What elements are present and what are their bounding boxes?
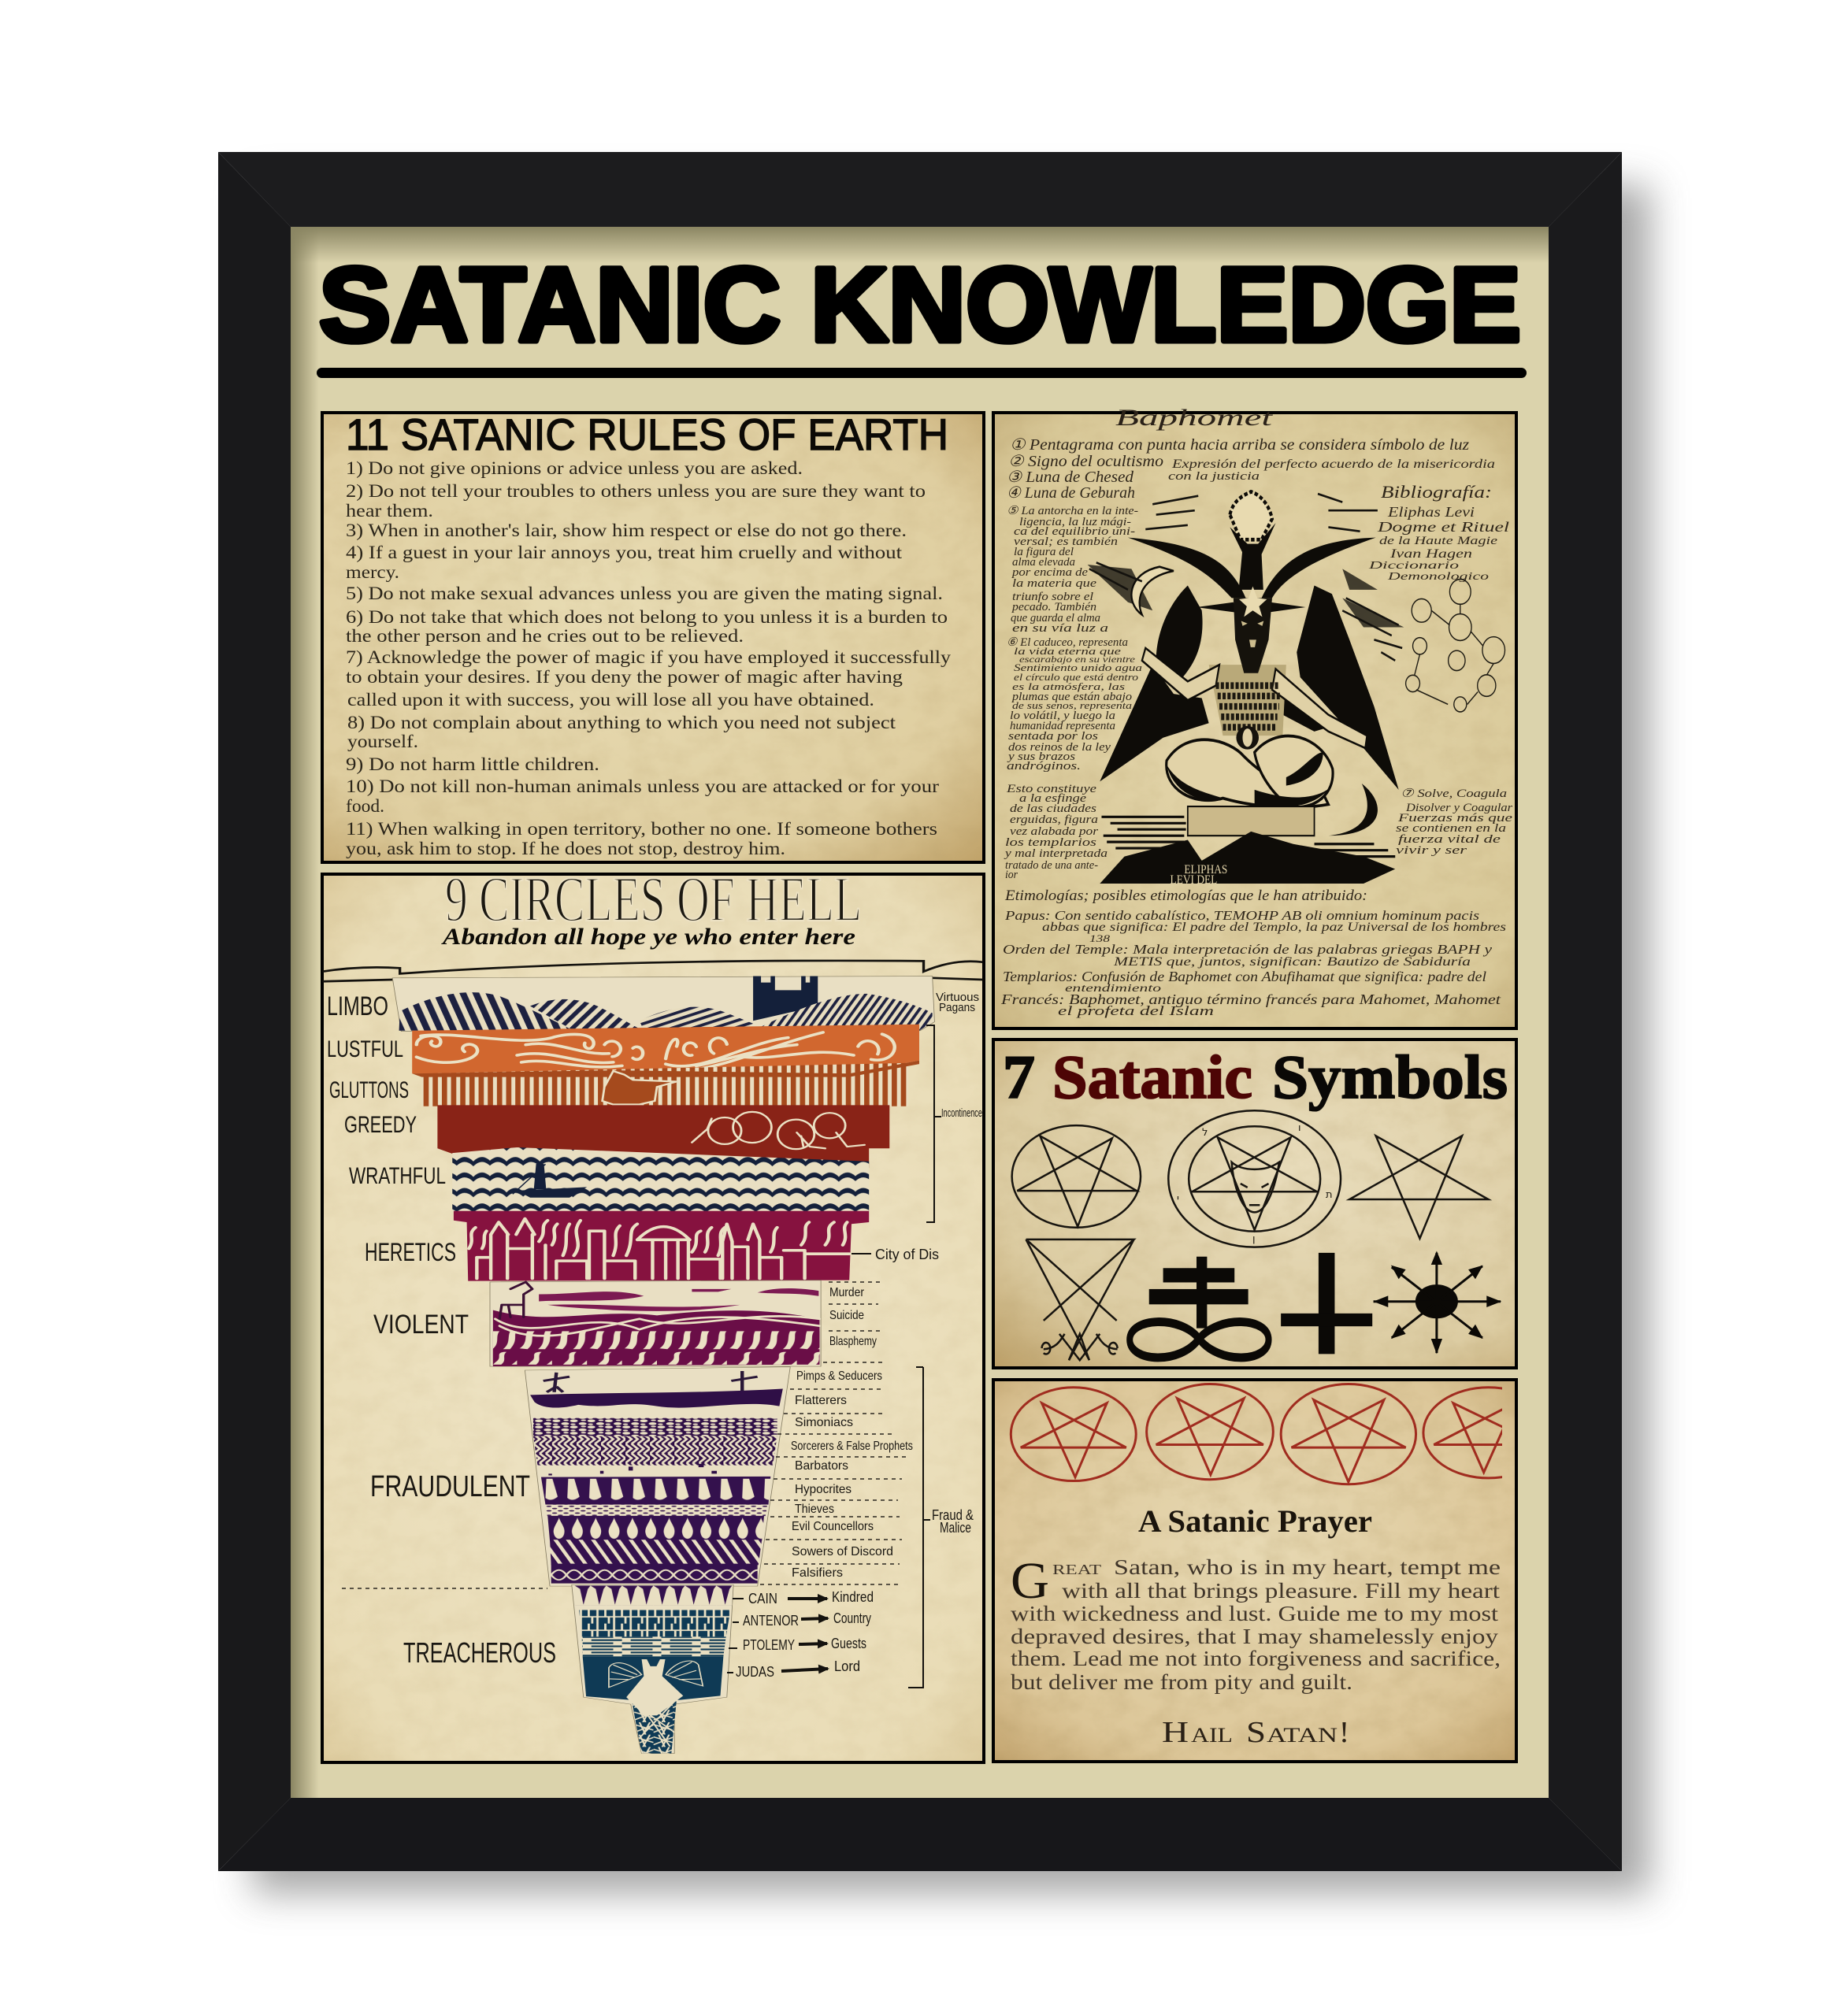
band: sorcerers [533,1436,777,1466]
text block: handwritten notes: dos reinos de la ley [1008,741,1111,754]
icon: castle [753,976,818,1021]
labels: circles of hell names: LIMBO [327,991,388,1021]
text block: rules list: 4) If a guest in your lair annoys you, treat him cruelly and without [346,543,903,562]
text block: handwritten notes: Orden del Temple: Mala interpretación de las palabras griegas BAPH y [1003,942,1493,957]
text block: handwritten notes: fuerza vital de [1398,833,1501,846]
panel: 7 satanic symbols [993,1040,1516,1368]
labels: sins and sub-circles: Fraud & [932,1507,974,1523]
text block: handwritten notes: humanidad representa [1010,720,1115,732]
labels: circles of hell names: TREACHEROUS [403,1636,556,1669]
text block: handwritten notes: es la atmósfera, las [1012,680,1125,692]
text block: handwritten notes: ② Signo del ocultismo [1008,453,1163,470]
text block: handwritten notes: ior [1005,869,1018,881]
text block: handwritten notes: alma elevada [1012,556,1075,569]
text block: handwritten notes: abbas que significa: El padre del Templo, la paz Universal de los hombres [1042,921,1506,934]
caduceus [1236,726,1259,750]
text block: handwritten notes: en su vía luz a [1012,622,1108,635]
text block: rules list: you, ask him to stop. If he does not stop, destroy him. [346,839,785,858]
text block: rules list [346,458,952,858]
text block: handwritten notes: escarabajo en su vientre [1019,654,1136,665]
labels: sins and sub-circles: Barbators [795,1459,848,1473]
text block: handwritten notes: triunfo sobre el [1012,591,1093,603]
text block: handwritten notes: METIS que, juntos, significan: Bautizo de Sabiduría [1113,955,1471,969]
labels: circles of hell names: HERETICS [365,1238,456,1266]
text block: handwritten notes: tratado de una ante- [1005,859,1098,872]
heading: symbols [1003,1043,1508,1111]
text block: handwritten notes: se contienen en la [1396,822,1506,835]
band: flatterers [530,1389,783,1408]
text block: handwritten notes: lo volátil, y luego la [1010,710,1115,722]
labels: circles of hell names: LUSTFUL [327,1036,403,1062]
text block: handwritten notes: sentada por los [1008,730,1098,743]
icon: hebrew letters on sigil: י [1177,1193,1179,1205]
panel: baphomet manuscript [993,405,1516,1028]
feather strokes [1089,494,1402,661]
text block: prayer: REAT [1052,1562,1101,1577]
text block: handwritten notes: ⑤ La antorcha en la inte- [1007,505,1138,517]
text block: handwritten notes: ④ Luna de Geburah [1007,484,1135,502]
boulders and figures [708,1117,741,1144]
text block: prayer: G [1011,1552,1049,1610]
text block: rules list: 9) Do not harm little children. [346,754,599,774]
labels: sins and sub-circles: JUDAS [736,1664,774,1680]
labels: circles of hell names: WRATHFUL [349,1163,446,1189]
icon: inverted cross [1281,1253,1372,1354]
diagram: small tree [1406,580,1505,712]
panel: 11 satanic rules of earth [322,410,984,862]
text block: handwritten notes: a la esfinge [1019,792,1086,805]
text block: handwritten notes: y mal interpretada [1004,847,1108,860]
text block: handwritten notes: el profeta del Islam [1058,1003,1214,1018]
icon: hebrew letters on sigil: ו [1298,1122,1301,1134]
text block: handwritten notes: de la Haute Magie [1379,535,1497,547]
text block: handwritten notes: Templarios: Confusión de Baphomet con Abufihamat que significa: padre del [1003,969,1486,984]
text block: handwritten notes: Etimologías; posibles etimologías que le han atribuido: [1004,888,1367,904]
text block: handwritten notes: Demonologico [1386,571,1489,583]
subheading: Abandon all hope ye who enter here [441,924,855,950]
illustration: baphomet figure: ELIPHAS [1184,863,1227,876]
chart: lower hell layers [525,1367,790,1754]
text block: prayer: with all that brings pleasure. Fill my heart [1062,1579,1501,1603]
wings [1088,565,1404,790]
band: falsifiers [551,1564,758,1584]
text block: handwritten notes: Eliphas Levi [1387,504,1475,520]
circle: lustful [412,1025,919,1073]
brackets and leader lines [342,1025,941,1688]
text block: handwritten notes: con la justicia [1168,470,1260,483]
title rule [317,368,1527,378]
demons [544,1371,758,1392]
labels: sins and sub-circles: Falsifiers [792,1566,843,1580]
text block: prayer: but deliver me from pity and guilt. [1011,1670,1352,1694]
text block: rules list: 10) Do not kill non-human animals unless you are attacked or for your [346,776,939,796]
heading: symbols: Satanic [1052,1043,1252,1111]
text block: prayer: with wickedness and lust. Guide me to my most [1011,1602,1499,1625]
text block: rules list: yourself. [347,732,418,751]
labels: sins and sub-circles: Incontinence [941,1106,982,1120]
text block: handwritten notes: Francés: Baphomet, antiguo término francés para Mahomet, Mahomet [1000,991,1501,1007]
labels: sins and sub-circles: Blasphemy [829,1335,877,1348]
circle: treacherous [572,1584,733,1754]
text block: handwritten notes: Esto constituye [1006,783,1096,795]
text block: rules list: to obtain your desires. If you deny the power of magic after having [346,667,903,687]
icon: boat and ferryman [517,1187,587,1198]
text block: handwritten notes: ⑥ El caduceo, representa [1007,636,1128,649]
labels: sins and sub-circles: Evil Councellors [792,1520,874,1533]
closing line [1162,1716,1349,1749]
band: judas [583,1656,723,1700]
band: barbators [548,1464,717,1476]
labels: circles of hell names [327,991,556,1669]
text block: prayer [1011,1552,1501,1694]
illustration: baphomet figure: LEVI DEL [1171,873,1217,887]
icon: hebrew letters on sigil: ל [1202,1127,1208,1139]
torch and horns [1128,491,1376,613]
closing line: AIL [1191,1724,1233,1747]
circle: gluttons [412,1061,919,1106]
text block: handwritten notes: ligencia, la luz mági- [1019,516,1131,528]
band: hypocrites [541,1477,770,1505]
text block: handwritten notes: Fuerzas más que [1397,812,1512,825]
circle: greedy [437,1105,889,1168]
band: sowers of discord [550,1540,762,1565]
row of red pentagrams [1011,1384,1553,1484]
text block: handwritten notes: plumas que están abajo [1011,691,1133,703]
picture frame [218,152,1622,1871]
icons: seven symbols [1012,1110,1501,1360]
labels: sins and sub-circles: Sorcerers & False Prophets [791,1440,913,1453]
band: caina [575,1585,732,1605]
text block: handwritten notes: Dogme et Rituel [1377,519,1509,535]
band: ptolemy [582,1636,726,1656]
crescent moons [1131,567,1174,615]
text block: prayer: them. Lead me not into forgiveness and sacrifice, [1011,1647,1501,1670]
text block: rules list: 1) Do not give opinions or advice unless you are asked. [346,458,803,478]
circle: wrathful [452,1147,869,1212]
icon: sigil of baphomet [1168,1110,1341,1247]
text block: handwritten notes: Sentimiento unido agua [1014,662,1143,673]
text block: handwritten notes: de sus senos, representa [1012,699,1133,711]
text block: handwritten notes: 138 [1089,932,1111,944]
text block: rules list: mercy. [346,562,399,582]
crossed legs [1167,736,1333,807]
text block: handwritten notes: y sus brazos [1007,750,1075,763]
labels: sins and sub-circles: ANTENOR [743,1613,799,1629]
labels: sins and sub-circles: City of Dis [875,1247,939,1262]
closing line: S [1246,1716,1266,1749]
heading: circles: 9 CIRCLES OF HELL [445,863,862,935]
icon: pentagram in circle [1012,1125,1141,1228]
text block: handwritten notes: la materia que [1012,577,1096,590]
head [1234,598,1272,673]
text block: rules list: 3) When in another's lair, show him respect or else do not go there. [346,521,907,540]
labels: sins and sub-circles: Guests [831,1636,866,1651]
icon: winged lucifer [609,1659,703,1747]
panel: 9 circles of hell [322,863,984,1762]
icon: chaos star [1374,1251,1501,1354]
icon: hebrew letters on sigil: ת [1326,1189,1333,1201]
labels: circles of hell names: VIOLENT [373,1310,469,1340]
text block: rules list: 5) Do not make sexual advances unless you are given the mating signal. [346,584,943,603]
labels: sins and sub-circles: Kindred [832,1589,874,1605]
band: thieves [545,1505,767,1518]
text block: prayer: Satan, who is in my heart, tempt me [1114,1555,1501,1579]
labels: circles of hell names: GLUTTONS [329,1077,409,1103]
text block: handwritten notes: andróginos. [1007,760,1081,773]
circle: limbo [392,976,934,1032]
mat board [291,227,1549,1798]
labels: sins and sub-circles: Lord [834,1658,860,1674]
labels: sins and sub-circles: Hypocrites [795,1483,852,1496]
text block: handwritten notes: el círculo que está dentro [1014,671,1139,683]
text block: handwritten notes: Ivan Hagen [1389,547,1472,561]
labels: circles of hell names: FRAUDULENT [370,1470,530,1503]
text block: handwritten notes: la figura del [1014,546,1074,558]
text block: rules list: food. [346,796,384,816]
text block: handwritten notes: entendimiento [1065,983,1161,995]
chart: upper hell layers [322,961,982,1366]
labels: sins and sub-circles: Murder [829,1286,865,1299]
text block: handwritten notes: de las ciudades [1010,802,1096,815]
circle: violent [490,1280,821,1366]
labels: sins and sub-circles: Sowers of Discord [792,1545,893,1558]
arrows: traitors to betrayed [781,1599,828,1671]
icon: hebrew letters on sigil: ן [1252,1233,1256,1245]
text block: handwritten notes: pecado. También [1011,601,1096,613]
panel: a satanic prayer [993,1380,1553,1762]
text block: handwritten notes: Diccionario [1367,560,1459,572]
ground lines [322,961,982,981]
labels: sins and sub-circles: Country [833,1610,871,1626]
labels: sins and sub-circles [736,991,982,1680]
band: simoniacs [533,1418,777,1436]
text block: handwritten notes: versal; es también [1014,536,1118,548]
heading: rules: 11 SATANIC RULES OF EARTH [346,410,948,459]
labels: sins and sub-circles: CAIN [748,1591,777,1606]
circle: heretics [454,1211,869,1281]
text block: rules list: 2) Do not tell your troubles to others unless you are sure they want to [346,481,926,501]
illustration: baphomet figure [1088,491,1505,887]
closing line: H [1162,1716,1189,1749]
icon: centaur [499,1282,532,1319]
text block: handwritten notes: que guarda el alma [1011,612,1100,624]
text block: rules list: 11) When walking in open territory, bother no one. If someone bothers [346,819,937,839]
icon: hebrew letters on sigil [1177,1122,1333,1245]
heading: symbols: Symbols [1272,1043,1508,1111]
text block: handwritten notes: Bibliografía: [1381,482,1492,502]
text block: rules list: 6) Do not take that which does not belong to you unless it is a burden to [346,607,948,627]
text block: handwritten notes: la vida eterna que [1014,645,1121,657]
text block: rules list: hear them. [346,501,433,521]
labels: sins and sub-circles: Malice [940,1520,971,1536]
leg shading [1167,752,1330,807]
icon: cerberus [603,1071,677,1104]
icon: leviathan cross [1130,1257,1269,1358]
torso and arms [1142,648,1367,748]
band: antenora [579,1610,730,1636]
labels: circles of hell names: GREEDY [344,1112,417,1138]
text block: handwritten notes: ③ Luna de Chesed [1007,469,1134,486]
band: evil councellors [547,1516,764,1540]
labels: sins and sub-circles: Suicide [829,1309,864,1322]
heading: symbols: 7 [1003,1043,1035,1111]
labels: sins and sub-circles: Pimps & Seducers [796,1369,882,1383]
pedestal and ground [1100,806,1395,884]
text block: prayer: depraved desires, that I may shamelessly enjoy [1011,1625,1499,1648]
text block: handwritten notes: ca del equilibrio uni- [1014,525,1135,538]
text block: handwritten notes [1000,436,1512,1018]
title: SATANIC KNOWLEDGE [319,246,1521,364]
text block: rules list: 8) Do not complain about anything to which you need not subject [347,713,896,732]
text block: handwritten notes: Disolver y Coagular [1405,802,1512,814]
text block: handwritten notes: vivir y ser [1396,844,1467,857]
labels: sins and sub-circles: Flatterers [795,1394,847,1407]
text block: handwritten notes: por encima de [1011,566,1088,579]
text block: handwritten notes: los templarios [1005,836,1096,849]
labels: sins and sub-circles: Virtuous [936,991,979,1004]
text block: rules list: called upon it with success, you will lose all you have obtained. [347,690,874,710]
text block: rules list: 7) Acknowledge the power of magic if you have employed it successfully [346,647,952,667]
labels: sins and sub-circles: Pagans [939,1001,975,1014]
labels: sins and sub-circles: PTOLEMY [743,1637,795,1653]
text block: handwritten notes: vez alabada por [1010,825,1098,838]
text block: handwritten notes: erguidas, figura [1010,813,1098,826]
text block: handwritten notes: Expresión del perfecto acuerdo de la misericordia [1171,458,1495,471]
closing line: ! [1339,1716,1349,1749]
heading: prayer: A Satanic Prayer [1138,1503,1372,1539]
circle: fraudulent [525,1367,790,1586]
frame shadow [252,185,1650,1894]
heading: baphomet: Baphomet [1115,405,1273,431]
text block: handwritten notes: Papus: Con sentido cabalístico, TEMOHP AB oli omnium hominum pacis [1004,908,1479,923]
labels: sins and sub-circles: Simoniacs [795,1416,853,1429]
closing line: ATAN [1267,1724,1338,1747]
icon: inverted pentagram [1349,1136,1489,1239]
text block: handwritten notes: ⑦ Solve, Coagula [1401,788,1507,800]
icon: sigil of lucifer [1026,1240,1134,1360]
text block: rules list: the other person and he cries out to be relieved. [346,626,744,646]
labels: sins and sub-circles: Thieves [795,1503,834,1516]
text block: handwritten notes: ① Pentagrama con punta hacia arriba se considera símbolo de luz [1010,436,1469,454]
